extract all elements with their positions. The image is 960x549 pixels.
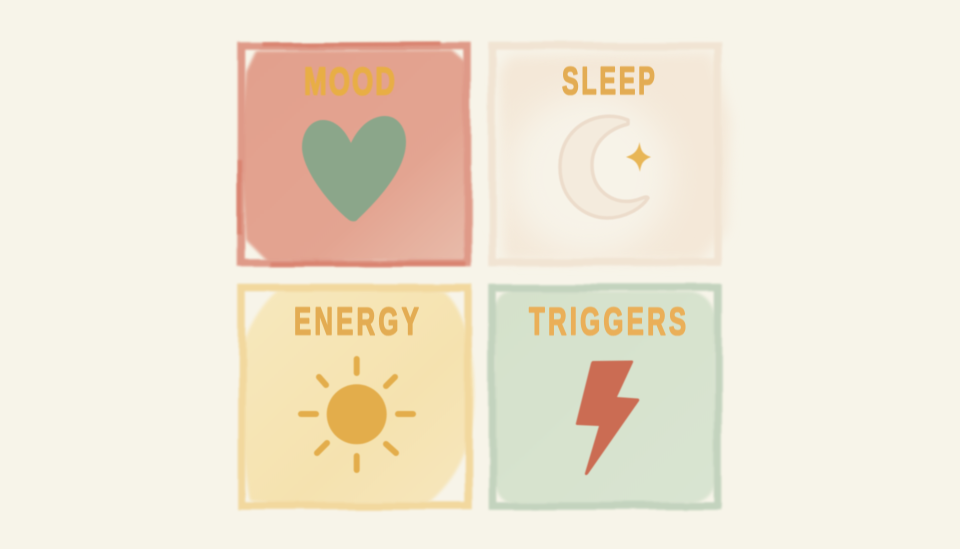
energy watercolor wash xyxy=(242,287,474,505)
mood heading: MOOD xyxy=(304,61,395,104)
sleep frame xyxy=(492,46,718,262)
triggers heading: TRIGGERS xyxy=(529,300,686,344)
icon: sun xyxy=(301,359,413,470)
panel: sleep xyxy=(492,46,730,262)
panel: energy xyxy=(242,287,474,506)
sleep heading: SLEEP xyxy=(562,58,655,102)
icon: star xyxy=(626,142,651,172)
energy heading: ENERGY xyxy=(294,300,419,344)
icon: heart xyxy=(302,116,406,221)
panel: triggers xyxy=(492,288,718,506)
icon: lightning bolt xyxy=(576,360,639,475)
panel: mood xyxy=(240,43,470,264)
mood frame xyxy=(242,46,468,263)
sleep wash pale centre xyxy=(508,93,672,257)
triggers watercolor wash xyxy=(494,291,716,505)
energy frame xyxy=(242,288,468,506)
mood frame dark edges xyxy=(240,43,466,264)
icon: crescent moon xyxy=(560,116,648,218)
mood watercolor wash xyxy=(240,50,470,262)
sleep watercolor wash xyxy=(499,52,730,262)
triggers frame xyxy=(492,288,718,506)
